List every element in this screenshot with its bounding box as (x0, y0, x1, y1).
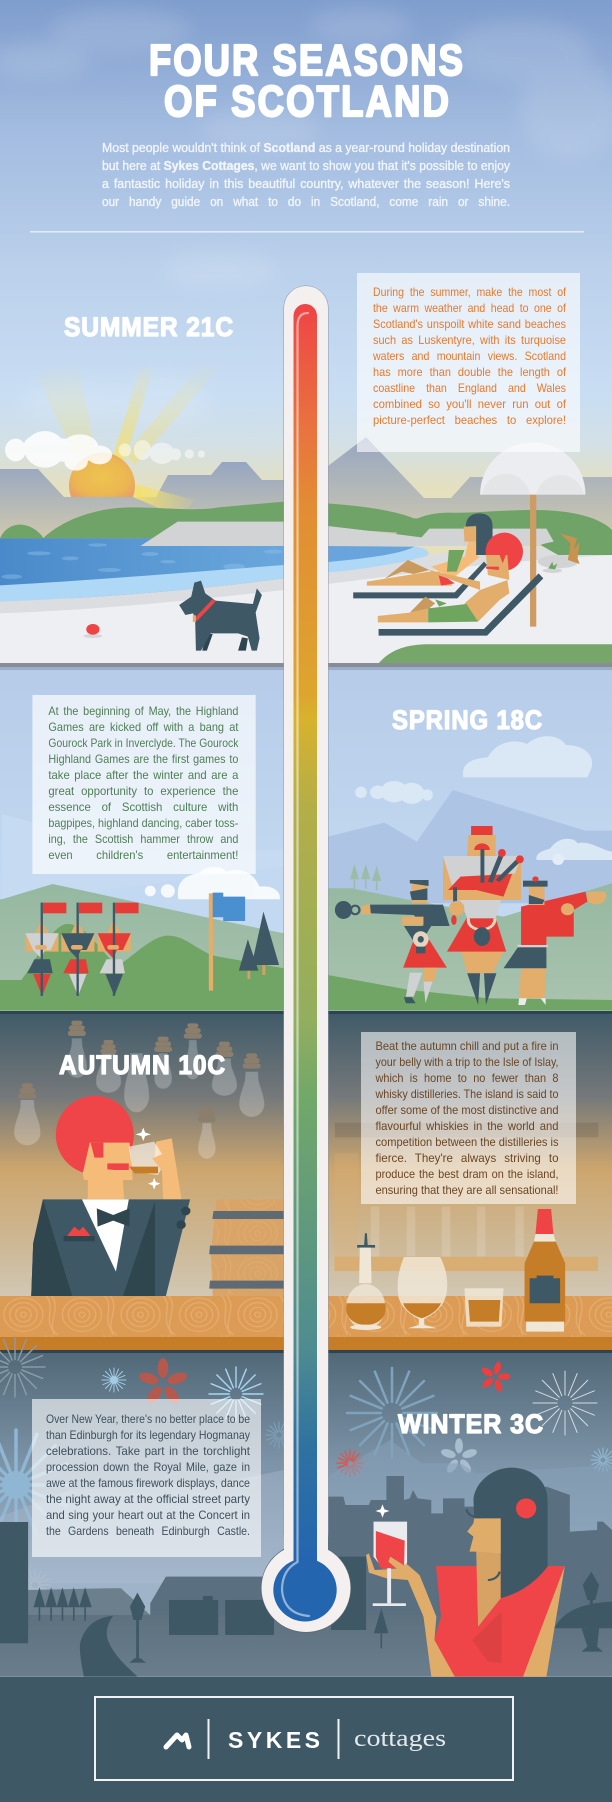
spring text box: Highland Games are the first games to (48, 752, 239, 766)
summer text box: Scotland's unspoilt white sand beaches (373, 317, 566, 331)
winter text box: Over New Year, there's no better place to be (46, 1412, 250, 1426)
spring scenery (0, 736, 612, 1011)
thermometer (261, 286, 351, 1633)
footer logo box (95, 1697, 513, 1780)
spring text box: At the beginning of May, the Highland (48, 704, 238, 718)
panel: summer (0, 0, 612, 663)
intro text: Most people wouldn't think of Scotland as a year-round holiday destination (102, 141, 510, 155)
mountains left (0, 462, 284, 540)
woman with wine (366, 1468, 565, 1677)
summer text box: picture-perfect beaches to explore! (373, 413, 566, 427)
winter text box: celebrations. Take part in the torchlight (46, 1444, 251, 1458)
winter text box: the Gardens beneath Edinburgh Castle. (46, 1524, 250, 1538)
whisky bottle (525, 1209, 565, 1332)
autumn text box: which is home to no fewer than 8 (375, 1071, 559, 1085)
winter text box: than Edinburgh for its legendary Hogmanay (46, 1428, 250, 1442)
autumn heading: AUTUMN 10C (59, 1050, 226, 1080)
panel: winter (0, 1337, 612, 1677)
autumn text box: Beat the autumn chill and put a fire in (376, 1039, 558, 1053)
winter text box (32, 1399, 261, 1557)
icon: mountain (166, 1735, 189, 1747)
spring text box: ing, the Scottish hammer throw and (48, 832, 238, 846)
spring text box: Games are kicked off with a bang at (48, 720, 239, 734)
autumn text box: competition between the distilleries is (376, 1135, 558, 1149)
summer heading: SUMMER 21C (64, 312, 234, 342)
spring text box: bagpipes, highland dancing, caber toss- (48, 816, 238, 830)
summer text box: coastline than England and Wales (373, 381, 566, 395)
spring text box: essence of Scottish culture with (48, 800, 238, 814)
intro text (102, 141, 511, 209)
winter text box: awe at the famous firework displays, dance (46, 1476, 250, 1490)
title: OF SCOTLAND (164, 77, 451, 126)
autumn text box (361, 1032, 576, 1204)
highland dancers (25, 903, 139, 996)
footer (0, 1677, 612, 1802)
spring text box: take place after the winter and are a (48, 768, 239, 782)
summer text box: such as Luskentyre, with its turquoise (373, 333, 566, 347)
hanging bulbs (14, 1021, 264, 1159)
autumn text box: produce the best dram on the island, (376, 1167, 558, 1181)
street lamps (130, 1572, 599, 1663)
summer text box: During the summer, make the most of (373, 285, 567, 299)
autumn text box: ensuring that they are all sensational! (376, 1183, 558, 1197)
autumn text box: your belly with a trip to the Isle of Islay, (376, 1055, 558, 1069)
title: FOUR SEASONS (149, 36, 465, 85)
logo word: cottages: cottages (354, 1726, 446, 1752)
beach landscape (0, 502, 612, 663)
summer text box: waters and mountain views. Scotland (372, 349, 566, 363)
logo word: sykes: SYKES (228, 1727, 320, 1753)
winter text box: and sing your heart out at the Concert in (46, 1508, 250, 1522)
umbrella (480, 442, 585, 627)
piper (443, 826, 524, 1005)
autumn text box: fierce. They're always striving to (376, 1151, 559, 1165)
flag (209, 893, 245, 991)
title (149, 36, 465, 126)
spring text box: even children's entertainment! (48, 848, 238, 862)
ball (84, 624, 102, 638)
autumn text box: whisky distilleries. The island is said to (375, 1087, 559, 1101)
spring heading: SPRING 18C (392, 705, 543, 735)
hammer thrower (335, 880, 450, 1003)
summer text box: has more than double the length of (373, 365, 567, 379)
whisky drinker (31, 1096, 190, 1296)
winter trees (34, 1587, 388, 1648)
trees (239, 912, 279, 979)
sunbathers (353, 513, 543, 636)
ray over hills (133, 485, 195, 517)
whisky decanter (346, 1233, 386, 1330)
sun (69, 453, 135, 497)
intro text: a fantastic holiday in this beautiful country, whatever the season! Here's (102, 177, 510, 191)
brandy glass (398, 1257, 447, 1328)
sun rays (35, 363, 220, 465)
spring text box: Gourock Park in Inverclyde. The Gourock (48, 736, 239, 750)
mountains right (328, 437, 612, 540)
panel: spring (0, 667, 612, 1011)
intro text: but here at Sykes Cottages, we want to show you that it's possible to enjoy (102, 159, 511, 173)
pointing figure (503, 876, 606, 1005)
clouds left (5, 431, 205, 471)
summer text box: combined so you'll never run out of (373, 397, 567, 411)
fireworks (0, 1337, 612, 1600)
autumn text box: offer some of the most distinctive and (376, 1103, 558, 1117)
winter text box: procession down the Royal Mile, gaze in (46, 1460, 250, 1474)
winter townscape (0, 1440, 612, 1677)
icon: dog (179, 581, 262, 651)
back shelves (334, 1123, 598, 1271)
winter heading: WINTER 3C (398, 1409, 544, 1439)
barrel (209, 1199, 284, 1296)
autumn text box: flavourful whiskies in the world and (376, 1119, 558, 1133)
panel: autumn (0, 1011, 612, 1350)
intro text: our handy guide on what to do in Scotland, come rain or shine. (102, 195, 510, 209)
spring text box (32, 695, 256, 874)
summer text box (357, 273, 580, 452)
winter text box: the night away at the official street party (46, 1492, 250, 1506)
bar counter (0, 1296, 612, 1350)
whisky tumbler (464, 1288, 503, 1327)
summer text box: the warm weather and head to one of (373, 301, 567, 315)
spring text box: great opportunity to experience the (48, 784, 239, 798)
